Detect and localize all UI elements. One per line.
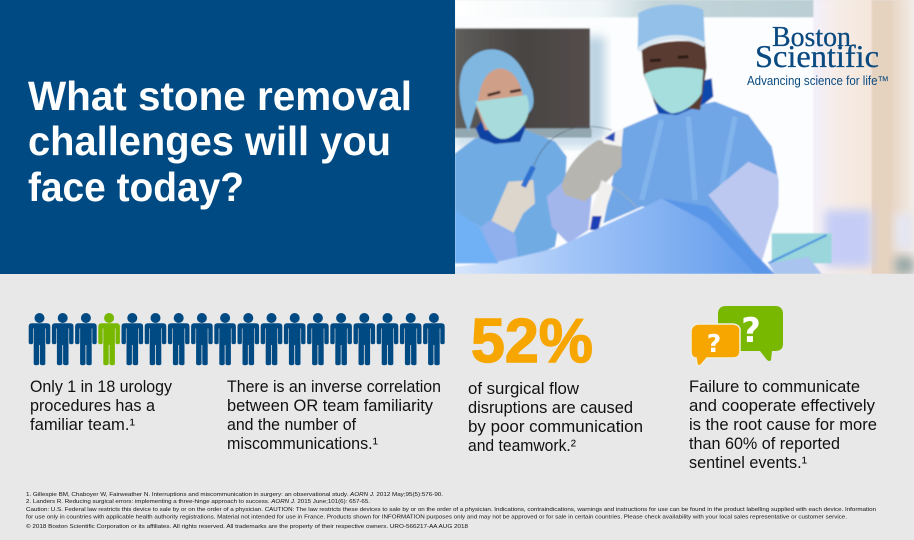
logo: Boston Scientific <box>747 21 889 88</box>
text block: sentinel events: is the root cause for more <box>689 416 877 434</box>
text block: surgical flow disruptions <box>468 380 643 455</box>
footnotes and legal text <box>26 492 876 530</box>
text block: OR team familiarity <box>227 378 441 453</box>
text block: familiar team statistic: Only 1 in 18 urology <box>30 378 173 396</box>
header panel: blue title block <box>0 0 455 274</box>
man <box>603 102 778 260</box>
icon: question speech bubbles <box>691 306 783 366</box>
photo: surgeons in operating room <box>455 0 914 274</box>
text block: sentinel events: and cooperate effectively <box>689 397 876 415</box>
big number: 52%: 52% <box>471 307 593 376</box>
logo: Boston Scientific: Boston <box>772 21 851 53</box>
text block: sentinel events: than 60% of reported <box>689 435 840 453</box>
text block: familiar team statistic: procedures has a <box>30 397 155 415</box>
title: challenges will you <box>28 118 391 164</box>
text block: surgical flow disruptions: disruptions are caused <box>468 399 633 417</box>
woman <box>455 128 567 263</box>
footnotes and legal text: for use only in countries with applicable health authority registrations. Material not intended for use in France. Products shown for INFORMATION purposes only and may not be approved or for sale in certain countries. Please check availability with your local sales representative or customer service. <box>26 514 847 520</box>
title <box>28 73 412 210</box>
footnotes and legal text: 2. Landers R. Reducing surgical errors: implementing a three-hinge approach to success. AORN J. 2015 June;101(6): 657-65. <box>26 499 370 505</box>
text block: surgical flow disruptions: and teamwork.² <box>468 437 577 455</box>
text block: surgical flow disruptions: by poor communication <box>468 418 643 436</box>
text block: sentinel events: sentinel events.¹ <box>689 454 808 472</box>
text block: OR team familiarity: between OR team familiarity <box>227 397 434 415</box>
text block: OR team familiarity: miscommunications.¹ <box>227 435 379 453</box>
logo: Boston Scientific: Scientific <box>755 38 879 74</box>
title: face today? <box>28 164 244 210</box>
icon: question speech bubbles: ? <box>707 329 721 358</box>
text block: familiar team statistic: familiar team.¹ <box>30 416 136 434</box>
text block: OR team familiarity: and the number of <box>227 416 356 434</box>
title: What stone removal <box>28 73 412 119</box>
footnotes and legal text: 1. Gillespie BM, Chaboyer W, Fairweather N. Interruptions and miscommunication in surgery: an observational study. AORN J. 2012 May;95(5):576-90. <box>26 492 443 498</box>
icon: question speech bubbles: ? <box>741 311 761 351</box>
text block: OR team familiarity: There is an inverse correlation <box>227 378 441 396</box>
text block: sentinel events: Failure to communicate <box>689 378 860 396</box>
pictogram: 18 people, one highlighted in green <box>29 313 445 365</box>
text block: familiar team statistic <box>30 378 173 434</box>
drape <box>455 198 775 274</box>
text block: surgical flow disruptions: of surgical flow <box>468 380 579 398</box>
footnotes and legal text: © 2018 Boston Scientific Corporation or its affiliates. All rights reserved. All trademarks are the property of their respective owners. URO-566217-AA AUG 2018 <box>26 523 468 530</box>
text block: sentinel events <box>689 378 877 472</box>
footnotes and legal text: Caution: U.S. Federal law restricts this device to sale by or on the order of a physician. CAUTION: The law restricts these devices to sale by or on the order of a physician. Indications, contraindications, warnings and instructions for use can be found in the product labelling supplied with each device. Information <box>26 507 876 513</box>
logo: Boston Scientific: Advancing science for life™ <box>747 74 889 88</box>
